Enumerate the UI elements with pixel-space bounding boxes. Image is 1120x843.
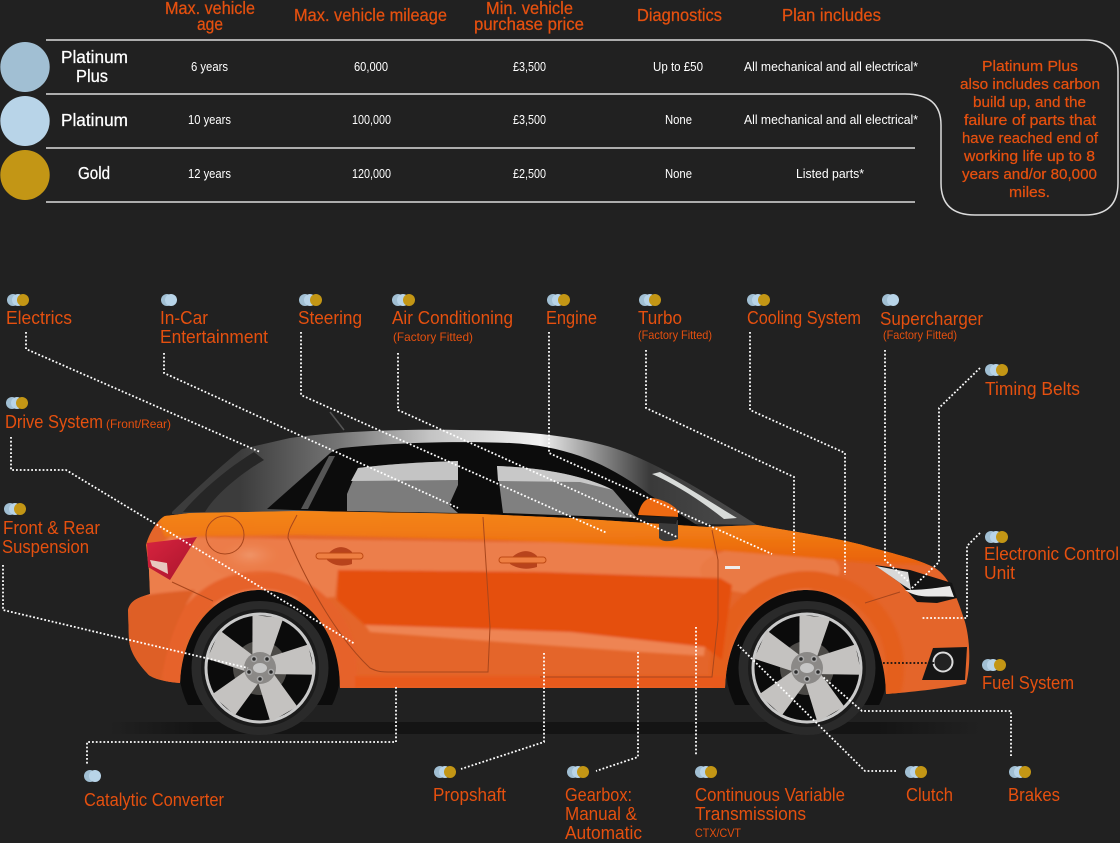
leader: cooling system — [750, 332, 845, 575]
label: Cooling System — [747, 294, 861, 328]
leader: timing belts — [912, 368, 980, 588]
row: Platinum Plus: Plus — [76, 66, 108, 86]
column headings: purchase price — [474, 14, 584, 34]
windscreen edge — [652, 472, 737, 519]
callout: Platinum Plus extras: miles. — [1009, 184, 1050, 201]
label: Continuous Variable Transmissions: Continuous Variable — [695, 784, 845, 805]
row: Platinum Plus: All mechanical and all electrical* — [744, 60, 918, 74]
label: Cooling System: Cooling System — [747, 307, 861, 328]
door handles — [316, 547, 546, 569]
row: Platinum Plus — [0, 42, 918, 92]
row: Platinum: Platinum — [61, 110, 128, 130]
wing mirror — [636, 498, 678, 541]
tail light — [147, 537, 197, 580]
row: Platinum — [0, 96, 918, 146]
column headings — [165, 0, 881, 34]
label: Supercharger: Supercharger — [880, 308, 983, 329]
leader: supercharger — [885, 350, 909, 582]
leader: in-car entertainment — [164, 353, 458, 508]
antenna — [330, 412, 344, 430]
row: Platinum Plus: 6 years — [191, 60, 228, 74]
label: Air Conditioning — [392, 294, 513, 344]
callout: Platinum Plus extras: build up, and the — [973, 94, 1086, 111]
leader: drive system — [11, 437, 355, 644]
callout: Platinum Plus extras: failure of parts that — [964, 112, 1097, 129]
row: Platinum: 100,000 — [352, 113, 391, 127]
label: Brakes: Brakes — [1008, 784, 1060, 805]
label: Steering — [298, 294, 362, 328]
label: Brakes — [1008, 766, 1060, 805]
panel seams — [172, 515, 900, 677]
leader: steering — [301, 332, 607, 533]
table rules and Platinum Plus callout outline — [46, 40, 1118, 215]
leader: electronic control unit — [922, 533, 980, 618]
label: Electrics: Electrics — [6, 307, 72, 328]
row: Platinum Plus: Platinum — [61, 47, 128, 67]
row: Platinum Plus: £3,500 — [513, 60, 546, 74]
label: Clutch — [905, 766, 953, 805]
label: Gearbox: Manual & — [565, 803, 638, 824]
label: Propshaft — [433, 766, 506, 805]
label: Propshaft: Propshaft — [433, 784, 506, 805]
label: In-Car Entertainment: In-Car — [160, 307, 208, 328]
label: Front & Rear Suspension: Suspension — [2, 536, 89, 557]
body shading bands — [128, 511, 930, 694]
callout: Platinum Plus extras: Platinum Plus — [982, 58, 1078, 75]
label: Drive System — [5, 397, 171, 432]
wheel arches — [180, 590, 886, 705]
label: Catalytic Converter — [84, 770, 224, 810]
label: Steering: Steering — [298, 307, 362, 328]
leader: front and rear suspension — [3, 565, 248, 668]
label: Electronic Control Unit — [984, 531, 1119, 583]
callout: Platinum Plus extras: working life up to 8 — [963, 148, 1095, 165]
row: Platinum Plus: Up to £50 — [653, 60, 703, 74]
row: Gold — [0, 150, 864, 200]
column headings: age — [197, 14, 223, 34]
label: Clutch: Clutch — [906, 784, 953, 805]
roof and pillars — [172, 430, 757, 525]
car illustration — [110, 412, 980, 756]
label: Drive System: (Front/Rear) — [106, 417, 171, 431]
leader: catalytic converter — [87, 687, 396, 765]
column headings: Plan includes — [782, 5, 881, 25]
label: Supercharger: (Factory Fitted) — [883, 328, 957, 342]
row: Gold: 12 years — [188, 167, 231, 181]
callout: Platinum Plus extras: have reached end of — [962, 130, 1099, 147]
leader: propshaft — [461, 653, 544, 769]
leader: electrics — [26, 332, 260, 452]
label: Timing Belts — [985, 364, 1080, 399]
label: Engine: Engine — [546, 307, 597, 328]
callout: Platinum Plus extras — [960, 58, 1100, 201]
label: Electronic Control Unit: Unit — [984, 562, 1015, 583]
leader: continuous variable transmissions — [695, 627, 697, 755]
row: Gold: 120,000 — [352, 167, 391, 181]
leader: engine — [549, 332, 772, 554]
label: Continuous Variable Transmissions: Transmissions — [695, 803, 806, 824]
front wheel — [738, 601, 876, 735]
label: Gearbox: Gearbox: — [565, 784, 632, 805]
label: Electrics — [6, 294, 72, 328]
label: Gearbox: Automatic — [565, 822, 642, 843]
fender badge — [725, 566, 740, 569]
label: Supercharger — [880, 294, 983, 342]
leader: clutch — [738, 645, 896, 771]
fog lamp — [922, 647, 967, 680]
label: Air Conditioning: Air Conditioning — [392, 307, 513, 328]
headlight — [875, 565, 957, 603]
label: Fuel System — [982, 659, 1074, 693]
label: In-Car Entertainment — [160, 294, 268, 347]
panel: plan comparison table — [0, 0, 1118, 215]
row: Gold: Listed parts* — [796, 167, 864, 181]
leader: turbo — [646, 350, 794, 553]
leader: gearbox — [596, 652, 638, 771]
row: Platinum: None — [665, 113, 692, 127]
label: Drive System: Drive System — [5, 411, 103, 432]
callout: Platinum Plus extras: years and/or 80,000 — [962, 166, 1097, 183]
row: Platinum: £3,500 — [513, 113, 546, 127]
label: Fuel System: Fuel System — [982, 672, 1074, 693]
leader: brakes — [823, 677, 1011, 756]
label: Turbo: (Factory Fitted) — [638, 328, 712, 342]
label: Turbo — [638, 294, 712, 342]
label: Catalytic Converter: Catalytic Converter — [84, 789, 224, 810]
ground shadow — [110, 722, 980, 734]
row: Gold: Gold — [78, 163, 110, 183]
label: Continuous Variable Transmissions — [695, 766, 845, 840]
label: Front & Rear Suspension — [2, 503, 100, 557]
label: Front & Rear Suspension: Front & Rear — [3, 517, 100, 538]
label: Turbo: Turbo — [638, 307, 682, 328]
row: Gold: None — [665, 167, 692, 181]
label: Air Conditioning: (Factory Fitted) — [393, 330, 473, 344]
label: Continuous Variable Transmissions: CTX/CVT — [695, 826, 742, 840]
rear wheel — [192, 601, 328, 735]
side windows — [267, 442, 700, 527]
row: Platinum: All mechanical and all electrical* — [744, 113, 918, 127]
row: Platinum: 10 years — [188, 113, 231, 127]
leader: fuel system — [883, 662, 935, 664]
row: Platinum Plus: 60,000 — [354, 60, 388, 74]
column headings: Max. vehicle mileage — [294, 5, 447, 25]
rear hatch glass — [183, 452, 264, 512]
leader: air conditioning — [398, 353, 677, 537]
column headings: Diagnostics — [637, 5, 722, 25]
row: Gold: £2,500 — [513, 167, 546, 181]
callout: Platinum Plus extras: also includes carbon — [960, 76, 1100, 93]
label: Timing Belts: Timing Belts — [985, 378, 1080, 399]
label: Gearbox — [565, 766, 642, 843]
label: In-Car Entertainment: Entertainment — [160, 326, 268, 347]
body shell — [128, 511, 969, 694]
leader lines — [3, 332, 1011, 771]
label: Engine — [546, 294, 597, 328]
